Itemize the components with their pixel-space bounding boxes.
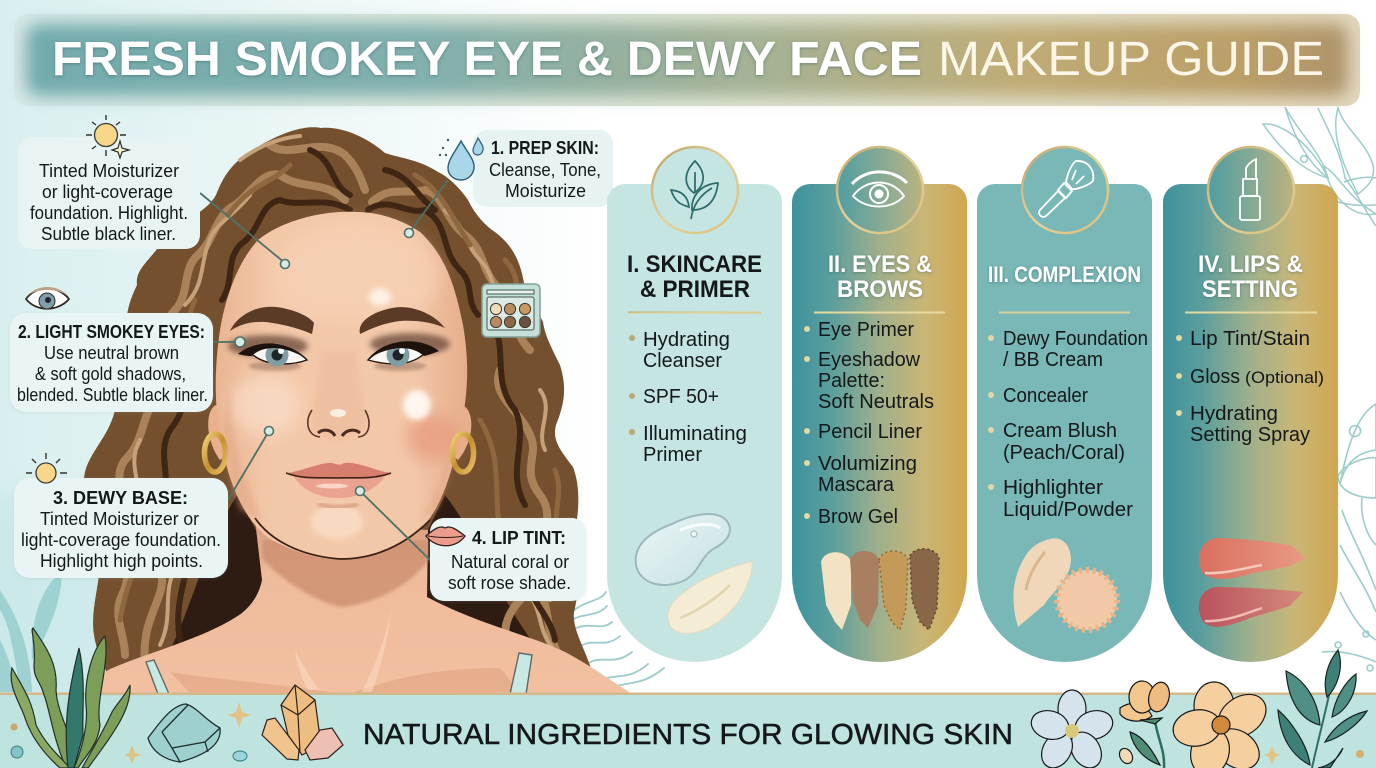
callout: light smokey eyes: & soft gold shadows,	[35, 364, 186, 384]
right eye	[368, 333, 450, 371]
icon: eyeshadow palette	[482, 284, 540, 337]
gel and cream swatches	[636, 514, 752, 633]
bottom band	[0, 692, 1376, 768]
callout: tinted moisturizer: foundation. Highlight.	[30, 203, 188, 223]
heading: & PRIMER	[640, 276, 750, 303]
callout: prep skin: Moisturize	[505, 181, 586, 201]
nose	[308, 345, 369, 440]
straps	[146, 653, 532, 694]
heading: I. SKINCARE	[627, 251, 762, 278]
decoration: teal squiggles near card one	[568, 592, 664, 690]
list: Hydrating	[1190, 403, 1278, 425]
list: Palette:	[818, 370, 885, 392]
list	[804, 319, 934, 528]
pointer lines and dots	[200, 180, 448, 560]
list: Illuminating	[643, 423, 747, 445]
list: Gloss	[1190, 366, 1240, 388]
illustration: seaweed	[11, 628, 130, 768]
earrings	[204, 434, 474, 472]
heading: BROWS	[837, 276, 923, 303]
callout: light smokey eyes: 2. LIGHT SMOKEY EYES:	[18, 322, 205, 342]
decoration: teal leaves top right	[1263, 107, 1376, 226]
panel: eyes and brows	[792, 147, 967, 662]
list: Cream Blush	[1003, 420, 1117, 442]
list: / BB Cream	[1003, 349, 1103, 371]
callout: tinted moisturizer: Subtle black liner.	[41, 224, 176, 244]
heading	[1198, 251, 1303, 303]
panel: lips and setting	[1163, 147, 1338, 662]
illustration: sparkle and beads	[10, 702, 251, 764]
list: Primer	[643, 444, 702, 466]
list: Cleanser	[643, 350, 722, 372]
illustration: crystals	[262, 685, 343, 760]
list: (Optional)	[1245, 368, 1324, 387]
list: Hydrating	[643, 329, 730, 351]
list: Lip Tint/Stain	[1190, 328, 1310, 350]
list: Eyeshadow	[818, 349, 921, 371]
list: Pencil Liner	[818, 421, 922, 443]
callout: prep skin	[473, 130, 613, 207]
decoration: teal leaves lower left	[0, 570, 62, 692]
list: Setting Spray	[1190, 424, 1310, 446]
callout: prep skin: Cleanse, Tone,	[489, 160, 601, 180]
callout: lip tint	[430, 518, 586, 601]
icon: lips	[426, 527, 465, 546]
callout: dewy base: light-coverage foundation.	[21, 530, 221, 550]
callout: tinted moisturizer: or light-coverage	[42, 182, 173, 202]
list: Eye Primer	[818, 319, 914, 341]
list	[1176, 328, 1324, 446]
icon: brush badge	[1022, 147, 1108, 233]
callout: lip tint: soft rose shade.	[448, 573, 571, 593]
lips	[286, 463, 391, 507]
left eye	[228, 335, 308, 371]
callout: tinted moisturizer: Tinted Moisturizer	[39, 161, 179, 181]
neck and shoulders	[88, 520, 632, 694]
callout: light smokey eyes: Use neutral brown	[44, 343, 179, 363]
list: Dewy Foundation	[1003, 328, 1148, 350]
panel: complexion	[977, 147, 1152, 662]
collarbone shading	[170, 540, 520, 693]
panel: skincare and primer	[607, 147, 782, 662]
list: SPF 50+	[643, 386, 719, 408]
list: Highlighter	[1003, 477, 1103, 499]
illustration: blue flower	[1028, 690, 1116, 768]
band heading: NATURAL INGREDIENTS FOR GLOWING SKIN	[363, 719, 1013, 751]
list: Soft Neutrals	[818, 391, 934, 413]
eyeshadow swatches	[821, 549, 939, 630]
portrait	[84, 127, 632, 694]
callout: lip tint: 4. LIP TINT:	[472, 528, 566, 548]
jaw line	[255, 518, 430, 559]
list: Brow Gel	[818, 506, 898, 528]
lip colour swatches	[1199, 538, 1305, 627]
list: Mascara	[818, 474, 895, 496]
heading	[627, 251, 762, 303]
title text: FRESH SMOKEY EYE & DEWY FACE	[52, 33, 922, 86]
icon: eye badge	[837, 147, 923, 233]
illustration: aqua gem	[148, 704, 220, 762]
callout: dewy base: Tinted Moisturizer or	[40, 509, 199, 529]
ears	[208, 405, 471, 460]
icon: eye	[26, 287, 69, 309]
callout: light smokey eyes	[10, 313, 213, 412]
list: Liquid/Powder	[1003, 499, 1133, 521]
icon: lipstick badge	[1208, 147, 1294, 233]
callout: tinted moisturizer	[18, 137, 200, 249]
heading	[828, 251, 932, 303]
heading: III. COMPLEXION	[988, 262, 1141, 287]
list	[988, 328, 1148, 521]
face shape	[216, 212, 467, 559]
icon: small sun	[26, 453, 67, 483]
title text: light part: MAKEUP GUIDE	[938, 33, 1324, 86]
decoration: teal line art lower right	[1322, 404, 1376, 671]
foundation and powder swatches	[1013, 538, 1117, 630]
list: Concealer	[1003, 385, 1088, 407]
illustration: teal plant	[1278, 650, 1367, 768]
heading: IV. LIPS &	[1198, 251, 1303, 278]
title banner	[14, 14, 1360, 106]
illustration: sparkle and dot right	[1264, 746, 1364, 765]
callout: light smokey eyes: blended. Subtle black liner.	[17, 385, 208, 405]
icon: leaf badge	[652, 147, 738, 233]
callout: lip tint: Natural coral or	[451, 552, 569, 572]
icon: water drops	[439, 138, 483, 180]
heading: SETTING	[1202, 276, 1298, 303]
hair	[84, 127, 592, 682]
list	[629, 329, 747, 466]
illustration: large orange flower	[1170, 682, 1274, 768]
illustration: small orange flower	[1117, 680, 1173, 768]
callout: dewy base: Highlight high points.	[40, 551, 203, 571]
icon: sun with sparkle	[86, 115, 129, 158]
callout: dewy base	[14, 478, 228, 578]
eyebrows	[230, 307, 445, 334]
callout: prep skin: 1. PREP SKIN:	[491, 138, 599, 158]
list: Volumizing	[818, 453, 917, 475]
callout: dewy base: 3. DEWY BASE:	[53, 488, 188, 508]
list: (Peach/Coral)	[1003, 442, 1125, 464]
heading: II. EYES &	[828, 251, 932, 278]
face soft tones	[225, 222, 458, 539]
